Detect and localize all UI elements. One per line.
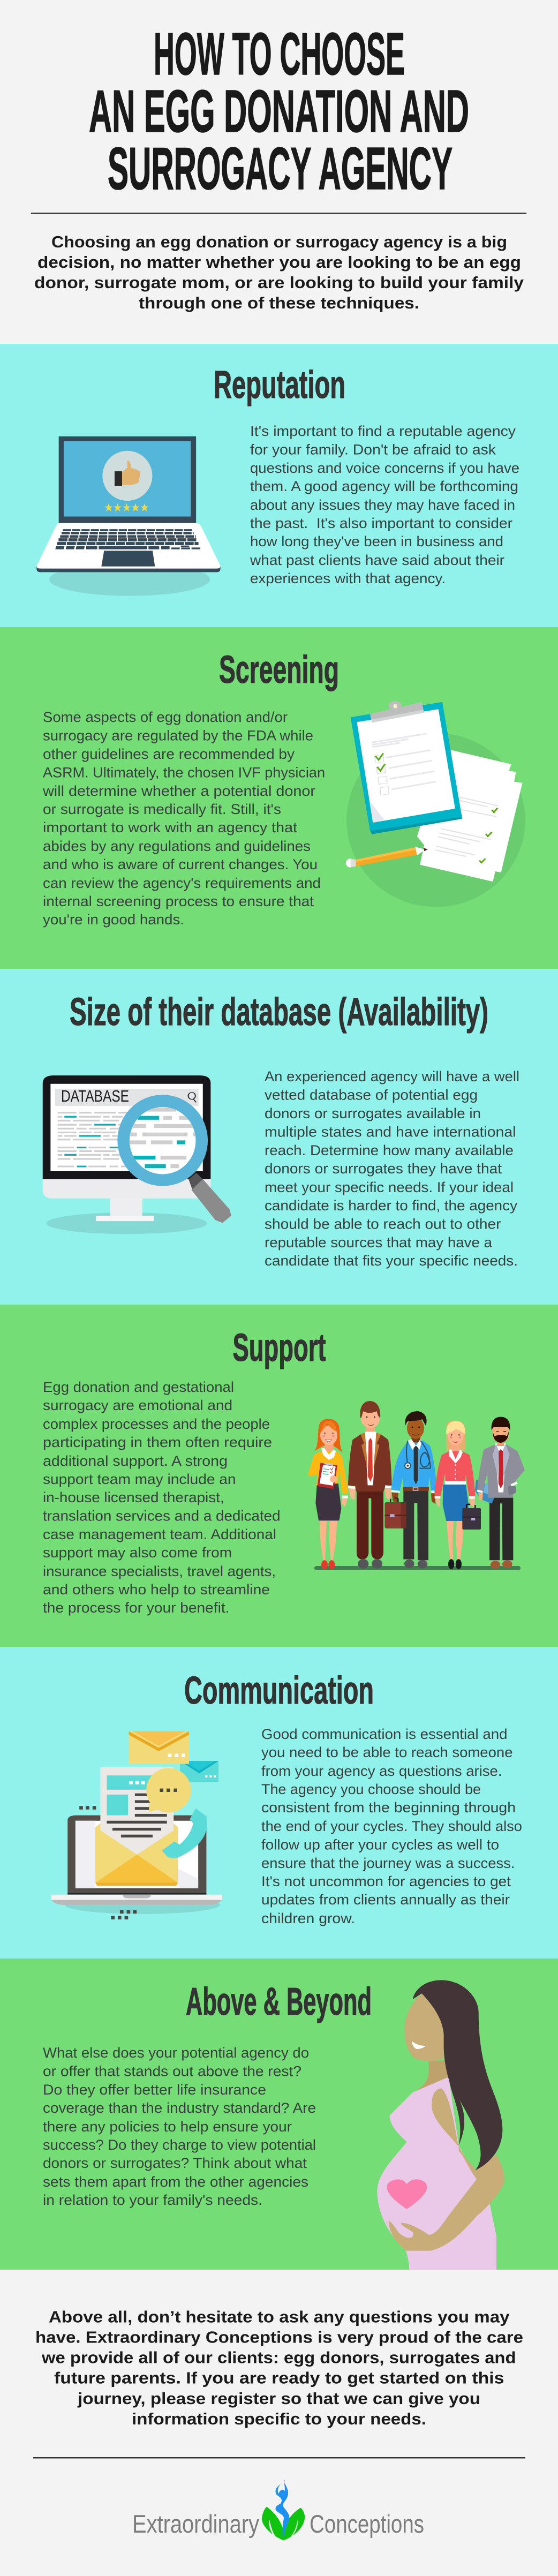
closing text: information specific to your needs.: [132, 2409, 426, 2428]
text block: communication: from your agency as questions arise.: [261, 1763, 502, 1779]
panel: database size: [0, 969, 558, 1305]
text block: database size: reputable sources that may have a: [265, 1234, 493, 1251]
text block: communication: follow up after your cycles as well to: [261, 1837, 499, 1853]
text block: support: surrogacy are emotional and: [43, 1397, 232, 1413]
text block: database size: [265, 1068, 519, 1269]
text block: reputation: for your family. Don't be afraid to ask: [250, 441, 496, 457]
illustration: pregnant woman with heart: [377, 1980, 504, 2270]
closing text: we provide all of our clients: egg donors, surrogates and: [41, 2348, 516, 2367]
heading: screening: Screening: [219, 649, 339, 691]
text block: communication: The agency you choose should be: [261, 1781, 481, 1797]
text block: database size: vetted database of potential egg: [265, 1087, 478, 1103]
text block: database size: should be able to reach out to other: [265, 1216, 501, 1232]
icon: monitor with magnifier: [43, 1075, 231, 1234]
heading: above and beyond: Above & Beyond: [186, 1980, 372, 2023]
closing text: journey, please register so that we can give you: [77, 2389, 480, 2408]
text block: communication: updates from clients annually as their: [261, 1892, 510, 1908]
text block: screening: or surrogate is medically fit. Still, it's: [43, 801, 281, 817]
intro text: Choosing an egg donation or surrogacy agency is a big: [51, 232, 507, 251]
text block: database size: meet your specific needs. If your ideal: [265, 1179, 514, 1195]
text block: reputation: questions and voice concerns if you have: [250, 460, 519, 476]
text block: database size: An experienced agency will have a well: [265, 1068, 519, 1084]
heading: support: Support: [232, 1327, 326, 1369]
text block: above and beyond: or offer that stands out above the rest?: [43, 2063, 301, 2079]
text block: screening: will determine whether a potential donor: [42, 783, 315, 799]
text block: screening: important to work with an agency that: [43, 819, 298, 835]
text block: above and beyond: success? Do they charge to view potential: [43, 2137, 316, 2153]
text block: screening: abides by any regulations and guidelines: [43, 838, 311, 854]
text block: communication: [261, 1726, 522, 1926]
text block: database size: donors or surrogates available in: [265, 1105, 481, 1121]
text block: communication: children grow.: [261, 1910, 355, 1926]
panel: communication: [0, 1647, 558, 1959]
doctor with stethoscope: [384, 1411, 437, 1569]
text block: reputation: the past. It's also important to consider: [250, 515, 512, 531]
heading: communication: Communication: [184, 1669, 374, 1712]
text block: reputation: what past clients have said about their: [250, 552, 504, 568]
text block: communication: you need to be able to reach someone: [261, 1744, 513, 1760]
text block: support: translation services and a dedicated: [43, 1508, 281, 1524]
text block: screening: and who is aware of current changes. You: [43, 856, 318, 872]
logo: Extraordinary Conceptions: Extraordinary: [132, 2510, 259, 2538]
text block: above and beyond: [43, 2045, 316, 2208]
text block: support: Egg donation and gestational: [43, 1379, 234, 1395]
title: [89, 21, 469, 202]
panel: support: [0, 1305, 558, 1647]
text block: screening: ASRM. Ultimately, the chosen IVF physician: [43, 765, 325, 781]
text block: above and beyond: donors or surrogates? Think about what: [43, 2155, 307, 2171]
intro text: decision, no matter whether you are looking to be an egg: [37, 253, 521, 272]
text block: database size: candidate that fits your specific needs.: [265, 1253, 518, 1269]
text block: screening: [42, 709, 325, 928]
text block: communication: It's not uncommon for agencies to get: [261, 1873, 511, 1889]
text block: above and beyond: Do they offer better life insurance: [43, 2082, 266, 2098]
icon: monitor with magnifier: DATABASE: [61, 1087, 129, 1105]
illustration: team of five people: [308, 1401, 525, 1570]
text block: screening: internal screening process to ensure that: [43, 893, 314, 909]
intro text: [34, 232, 524, 312]
woman in red blouse: [435, 1421, 481, 1569]
icon: clipboard checklist and pencil: [346, 701, 525, 907]
closing text: future parents. If you are ready to get started on this: [54, 2368, 504, 2387]
text block: reputation: experiences with that agency.: [250, 570, 446, 586]
text block: screening: Some aspects of egg donation and/or: [43, 709, 288, 725]
woman with clipboard: [308, 1419, 349, 1569]
panel: above and beyond: [0, 1959, 558, 2270]
text block: database size: reach. Determine how many available: [265, 1142, 514, 1158]
text block: support: support team may include an: [43, 1471, 236, 1487]
icon: laptop with envelopes and phone: [51, 1731, 222, 1919]
logo: Extraordinary Conceptions: [132, 2480, 424, 2540]
text block: reputation: It's important to find a reputable agency: [250, 423, 516, 439]
text block: screening: surrogacy are regulated by the FDA while: [43, 728, 313, 744]
man in brown suit: [348, 1401, 392, 1569]
text block: above and beyond: sets them apart from the other agencies: [43, 2174, 308, 2190]
logo: Extraordinary Conceptions: Conceptions: [310, 2510, 424, 2538]
text block: communication: consistent from the beginning through: [261, 1799, 516, 1816]
text block: above and beyond: What else does your potential agency do: [43, 2045, 309, 2061]
closing text: [35, 2308, 523, 2428]
text block: support: additional support. A strong: [43, 1453, 228, 1469]
icon: laptop with thumbs up: [36, 436, 221, 596]
closing text: Above all, don’t hesitate to ask any questions you may: [49, 2308, 510, 2326]
text block: support: and others who help to streamline: [43, 1581, 270, 1598]
text block: screening: other guidelines are recommended by: [43, 746, 295, 762]
text block: support: in-house licensed therapist,: [43, 1489, 224, 1505]
text block: reputation: [250, 423, 519, 586]
panel: reputation: [0, 344, 558, 627]
closing text: have. Extraordinary Conceptions is very proud of the care: [35, 2328, 523, 2347]
man in grey jacket: [475, 1417, 525, 1569]
intro text: through one of these techniques.: [139, 293, 419, 312]
text block: database size: candidate is harder to find, the agency: [265, 1197, 518, 1214]
text block: support: insurance specialists, travel agents,: [43, 1563, 276, 1579]
text block: database size: donors or surrogates they have that: [265, 1161, 502, 1177]
text block: above and beyond: there any policies to help ensure your: [43, 2119, 292, 2135]
text block: above and beyond: in relation to your family's needs.: [43, 2192, 262, 2208]
text block: communication: Good communication is essential and: [261, 1726, 508, 1742]
text block: support: the process for your benefit.: [43, 1600, 230, 1616]
text block: reputation: them. A good agency will be forthcoming: [250, 478, 518, 494]
panel: screening: [0, 627, 558, 969]
text block: support: participating in them often require: [43, 1434, 272, 1450]
text block: screening: you're in good hands.: [43, 912, 184, 928]
intro text: donor, surrogate mom, or are looking to build your family: [34, 273, 524, 292]
text block: reputation: about any issues they may have faced in: [250, 497, 515, 513]
text block: support: [43, 1379, 281, 1616]
text block: database size: multiple states and have international: [265, 1124, 516, 1140]
text block: support: complex processes and the people: [43, 1416, 270, 1432]
text block: communication: the end of your cycles. They should also: [261, 1818, 522, 1834]
text block: screening: can review the agency's requirements and: [43, 875, 321, 891]
text block: above and beyond: coverage than the industry standard? Are: [43, 2100, 316, 2116]
text block: support: support may also come from: [43, 1545, 232, 1561]
text block: communication: ensure that the journey was a success.: [261, 1855, 515, 1871]
text block: support: case management team. Additional: [43, 1526, 276, 1542]
heading: reputation: Reputation: [214, 364, 345, 406]
text block: reputation: how long they've been in business and: [250, 533, 503, 549]
